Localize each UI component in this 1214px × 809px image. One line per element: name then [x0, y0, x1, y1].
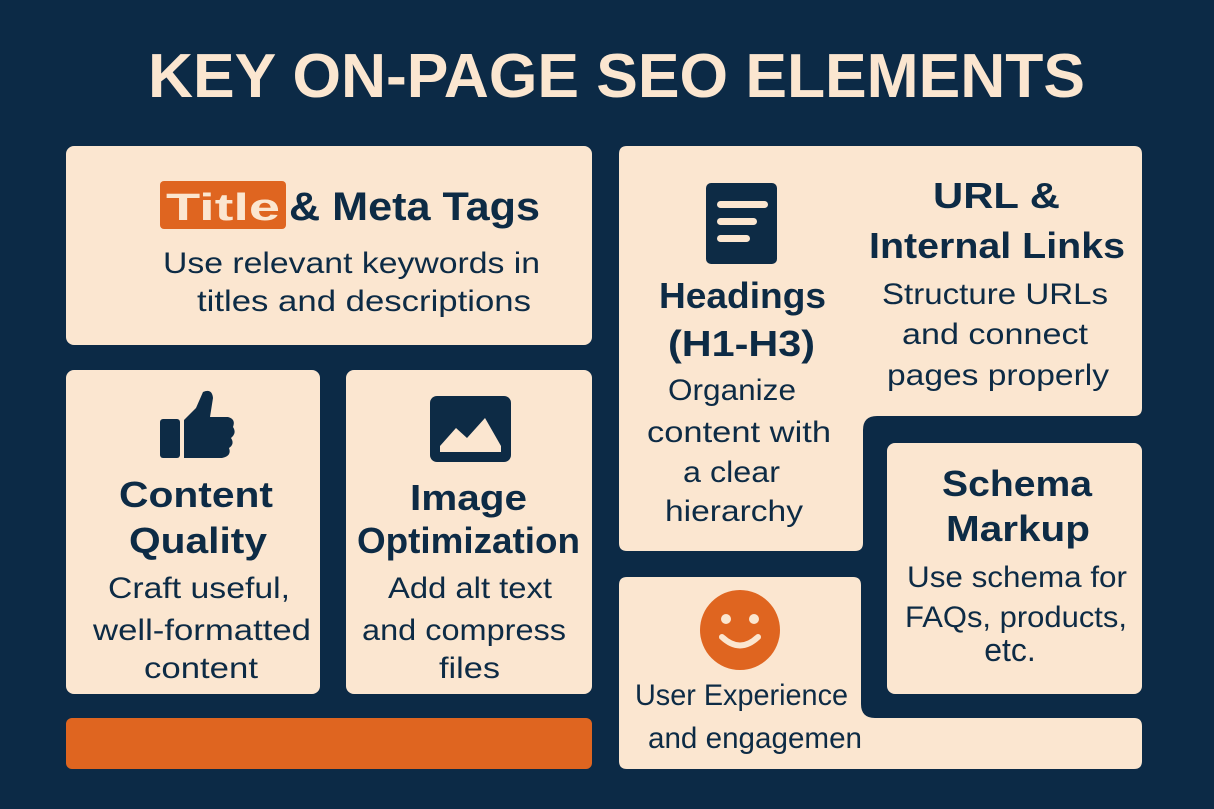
panel: user experience (L-shape): User Experience: [635, 679, 848, 712]
panel: user experience (L-shape): [619, 577, 1142, 769]
panel: image optimization: [346, 370, 592, 694]
title highlight box: [160, 181, 286, 229]
panel: title & meta tags: & Meta Tags: [289, 185, 540, 229]
panel: headings and URL (L-shape): Structure URLs: [882, 278, 1108, 311]
panel: headings and URL (L-shape): Internal Links: [869, 225, 1125, 266]
panel: content quality: Craft useful,: [108, 572, 290, 605]
panel: title & meta tags: titles and descriptions: [197, 285, 531, 318]
panel: schema markup: Schema: [942, 463, 1093, 504]
panel: content quality: well-formatted: [92, 614, 311, 647]
panel: title & meta tags: Title: [166, 187, 280, 229]
panel: headings and URL (L-shape): Organize: [668, 374, 796, 407]
panel: headings and URL (L-shape): content with: [647, 416, 831, 449]
panel: headings and URL (L-shape): URL &: [933, 175, 1060, 216]
panel: schema markup: [887, 443, 1142, 694]
panel: title & meta tags: Use relevant keywords in: [163, 247, 540, 280]
panel: schema markup: Use schema for: [907, 561, 1127, 594]
panel: image optimization: files: [439, 652, 500, 685]
panel: schema markup: etc.: [984, 632, 1036, 668]
panel: schema markup: Markup: [946, 508, 1090, 549]
panel: content quality: [66, 370, 320, 694]
panel: headings and URL (L-shape): [619, 146, 1142, 551]
panel: content quality: Quality: [129, 520, 267, 561]
panel: title & meta tags: [66, 146, 592, 345]
icon: image: [430, 396, 511, 462]
panel: content quality: content: [144, 652, 259, 685]
panel: headings and URL (L-shape): pages properly: [887, 359, 1109, 392]
panel: headings and URL (L-shape): hierarchy: [665, 495, 803, 528]
panel: headings and URL (L-shape): a clear: [683, 456, 780, 489]
title: KEY ON-PAGE SEO ELEMENTS: [148, 42, 1085, 111]
panel: image optimization: Image: [410, 477, 527, 518]
panel: headings and URL (L-shape): (H1-H3): [668, 323, 815, 364]
icon: smiley: [700, 590, 780, 670]
panel: content quality: Content: [119, 474, 273, 515]
panel: schema markup: FAQs, products,: [905, 601, 1127, 634]
panel: user experience (L-shape): and engagemen: [648, 722, 862, 755]
orange bar: [66, 718, 592, 769]
panel: image optimization: and compress: [362, 614, 566, 647]
panel: image optimization: Add alt text: [388, 572, 553, 605]
panel: headings and URL (L-shape): and connect: [902, 318, 1089, 351]
panel: headings and URL (L-shape): Headings: [659, 275, 826, 316]
icon: document: [706, 183, 777, 264]
icon: thumbs up: [160, 391, 235, 458]
panel: image optimization: Optimization: [357, 520, 580, 561]
